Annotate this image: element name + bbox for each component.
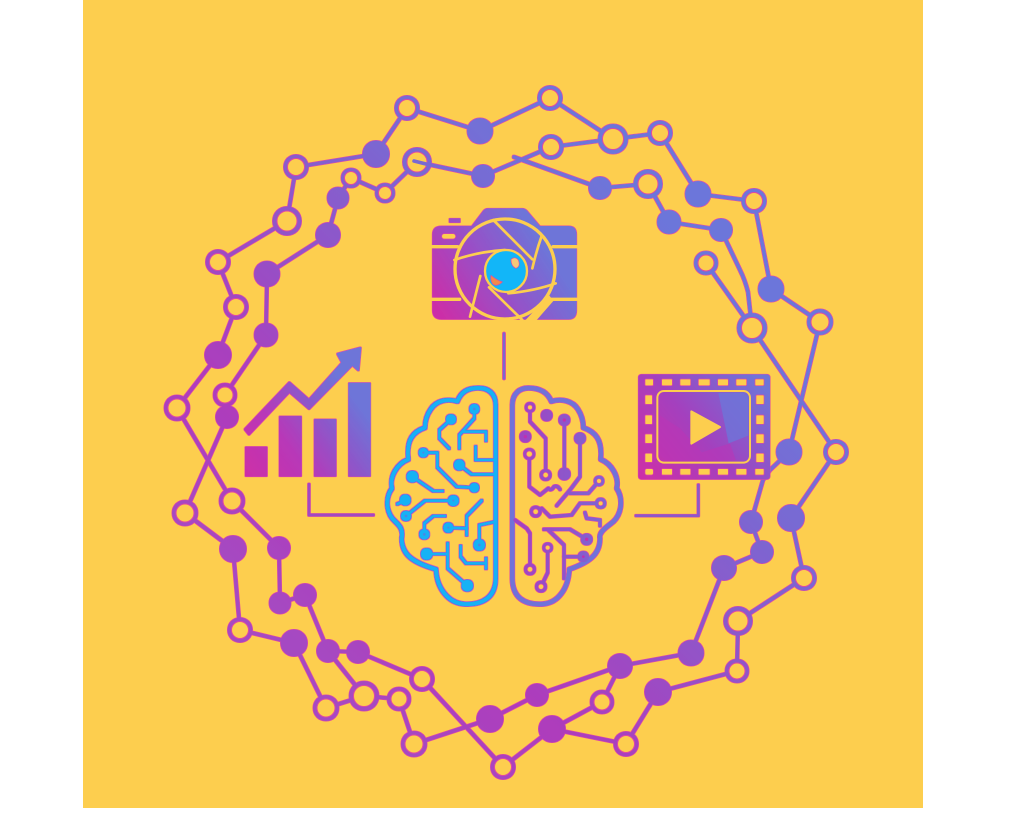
trend arrow <box>245 348 360 434</box>
camera body <box>432 208 577 319</box>
neural network ring <box>164 86 848 780</box>
open node centres <box>168 90 844 776</box>
left brain node dots <box>405 408 481 546</box>
network lines and node discs <box>164 86 848 780</box>
connector: camera to brain <box>502 332 506 380</box>
left brain circuits <box>397 409 496 586</box>
right brain outline <box>512 388 621 604</box>
play button <box>691 411 720 444</box>
connector: video to brain <box>636 485 698 516</box>
icon: bar chart with arrow <box>245 348 373 515</box>
right brain filled node dots <box>524 418 588 558</box>
line stub inside open node <box>414 161 430 165</box>
left hemisphere <box>387 388 496 604</box>
icon: circuit brain <box>387 388 621 604</box>
right hemisphere <box>512 388 621 604</box>
lens <box>485 250 527 292</box>
camera cutouts and aperture lines <box>431 219 578 322</box>
right brain node centres <box>526 405 603 589</box>
icon: video film strip <box>636 374 770 516</box>
bars <box>245 383 371 477</box>
connector: chart to brain <box>309 484 373 515</box>
connector: camera to side <box>577 267 602 269</box>
icon: camera <box>431 208 578 322</box>
yellow background panel <box>83 0 923 808</box>
sprocket holes <box>645 379 764 475</box>
left brain outline <box>387 388 496 604</box>
right brain circuits <box>515 407 601 587</box>
film frame <box>638 374 770 479</box>
video screen <box>657 391 750 463</box>
